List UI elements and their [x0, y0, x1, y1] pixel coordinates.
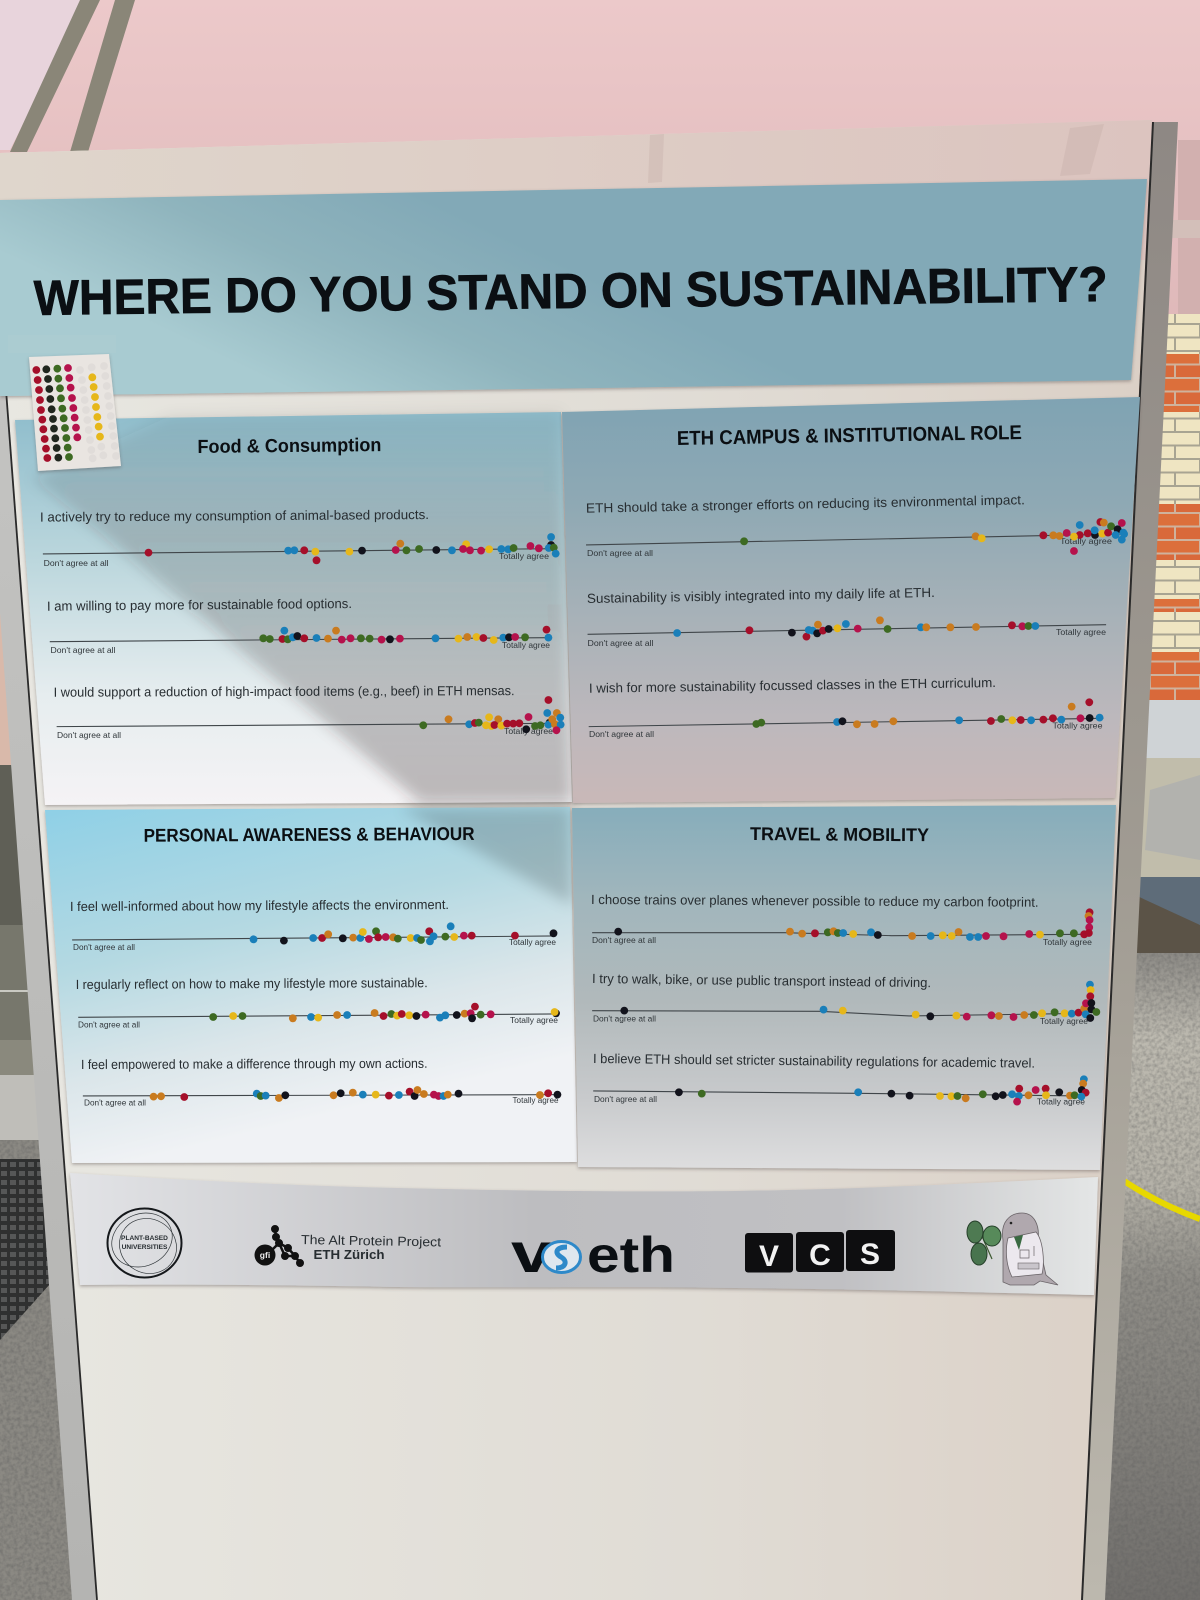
logo: VSETH: v: [511, 1221, 552, 1284]
statement 3: [589, 675, 1103, 739]
statement 3: I wish for more sustainability focussed classes in the ETH curriculum.: [589, 675, 996, 696]
statement 1: Totally agree: [1060, 536, 1112, 546]
statement 3: I would support a reduction of high-impact food items (e.g., beef) in ETH mensas.: [54, 683, 515, 700]
statement 1: [586, 492, 1124, 558]
statement 2: I regularly reflect on how to make my lifestyle more sustainable.: [76, 975, 428, 992]
statement 1: [591, 892, 1092, 947]
statement 3: Totally agree: [504, 726, 553, 736]
statement 2: I try to walk, bike, or use public transport instead of driving.: [592, 971, 931, 990]
title: WHERE DO YOU STAND ON SUSTAINABILITY?: [33, 257, 1108, 326]
logo: The Alt Protein Project: ETH Zürich: [314, 1247, 385, 1262]
statement 3: I feel empowered to make a difference through my own actions.: [81, 1056, 428, 1072]
panel heading: TRAVEL & MOBILITY: [750, 823, 930, 845]
statement 2: I am willing to pay more for sustainable food options.: [47, 596, 352, 614]
panel: Food & Consumption: [15, 412, 572, 805]
statement 2: [587, 585, 1106, 648]
statement 2: [76, 975, 558, 1030]
statement 3: Totally agree: [1037, 1097, 1085, 1107]
statement 3: [593, 1051, 1086, 1107]
ground and stone at right: [1090, 700, 1200, 1600]
statement 1: I actively try to reduce my consumption of animal-based products.: [40, 507, 429, 525]
logo: The Alt Protein Project: gfi: [260, 1250, 270, 1260]
statement 2: [592, 971, 1096, 1026]
statement 1: Don't agree at all: [44, 558, 109, 568]
statement 2: Totally agree: [502, 640, 550, 650]
statement 3: Don't agree at all: [589, 729, 654, 739]
tent canopy background: [0, 0, 1200, 330]
statement 1: Don't agree at all: [592, 935, 656, 945]
right frame post: [1082, 122, 1178, 1600]
statement 2: Don't agree at all: [50, 645, 116, 655]
logo: Plant-Based Universities: PLANT-BASED: [121, 1235, 168, 1242]
statement 2: Don't agree at all: [78, 1020, 140, 1030]
statement 3: Don't agree at all: [594, 1094, 657, 1104]
statement 3: Don't agree at all: [57, 730, 121, 740]
statement 1: Totally agree: [509, 937, 556, 947]
statement 3: Totally agree: [512, 1095, 559, 1105]
logo: The Alt Protein Project: [254, 1229, 442, 1266]
statement 2: Sustainability is visibly integrated into my daily life at ETH.: [587, 585, 935, 606]
statement 1: Totally agree: [499, 551, 549, 561]
logo: VCS: S: [860, 1238, 880, 1271]
statement 1: I feel well-informed about how my lifestyle affects the environment.: [70, 897, 449, 914]
panel heading: Food & Consumption: [197, 435, 382, 458]
panel heading: ETH CAMPUS & INSTITUTIONAL ROLE: [677, 422, 1022, 450]
statement 2: [47, 596, 550, 655]
logo: VCS: C: [809, 1239, 831, 1272]
title banner: [0, 179, 1147, 396]
panel: ETH Campus & Institutional Role: [562, 397, 1140, 803]
statement 3: Totally agree: [1052, 721, 1103, 731]
left frame post: [0, 310, 97, 1600]
statement 1: Totally agree: [1043, 937, 1092, 947]
logo: VCS: [745, 1230, 895, 1273]
statement 1: Don't agree at all: [73, 942, 135, 952]
statement 3: I believe ETH should set stricter sustainability regulations for academic travel.: [593, 1051, 1035, 1071]
statement 2: Totally agree: [1040, 1016, 1088, 1026]
ground and glass at left: [0, 600, 110, 1600]
logo: The Alt Protein Project: The Alt Protein Project: [301, 1232, 442, 1249]
statement 2: Don't agree at all: [593, 1014, 656, 1024]
statement 1: Don't agree at all: [587, 548, 653, 558]
statement 2: Totally agree: [510, 1015, 558, 1025]
statement 1: [70, 897, 556, 952]
brick wall: [1130, 314, 1200, 700]
logo banner: [70, 1173, 1098, 1295]
statement 2: Totally agree: [1056, 627, 1106, 637]
mascot: mole with leaves: [967, 1213, 1058, 1285]
logo: VSETH: eth: [587, 1227, 675, 1283]
statement 3: Don't agree at all: [84, 1098, 146, 1108]
statement 1: I choose trains over planes whenever possible to reduce my carbon footprint.: [591, 892, 1039, 910]
statement 1: [40, 507, 556, 568]
logo: VCS: V: [759, 1240, 779, 1273]
panel: Travel & Mobility: [572, 805, 1116, 1170]
statement 2: Don't agree at all: [588, 638, 654, 648]
logo: VSETH: [511, 1221, 675, 1284]
sticker sheet: [8, 335, 121, 471]
panel: Personal Awareness & Behaviour: [45, 807, 577, 1163]
statement 3: [54, 683, 561, 740]
statement 3: [81, 1056, 559, 1108]
logo: Plant-Based Universities: UNIVERSITIES: [122, 1244, 168, 1251]
logo: Plant-Based Universities: [103, 1203, 187, 1284]
panel heading: PERSONAL AWARENESS & BEHAVIOUR: [144, 823, 475, 846]
statement 1: ETH should take a stronger efforts on reducing its environmental impact.: [586, 492, 1025, 516]
